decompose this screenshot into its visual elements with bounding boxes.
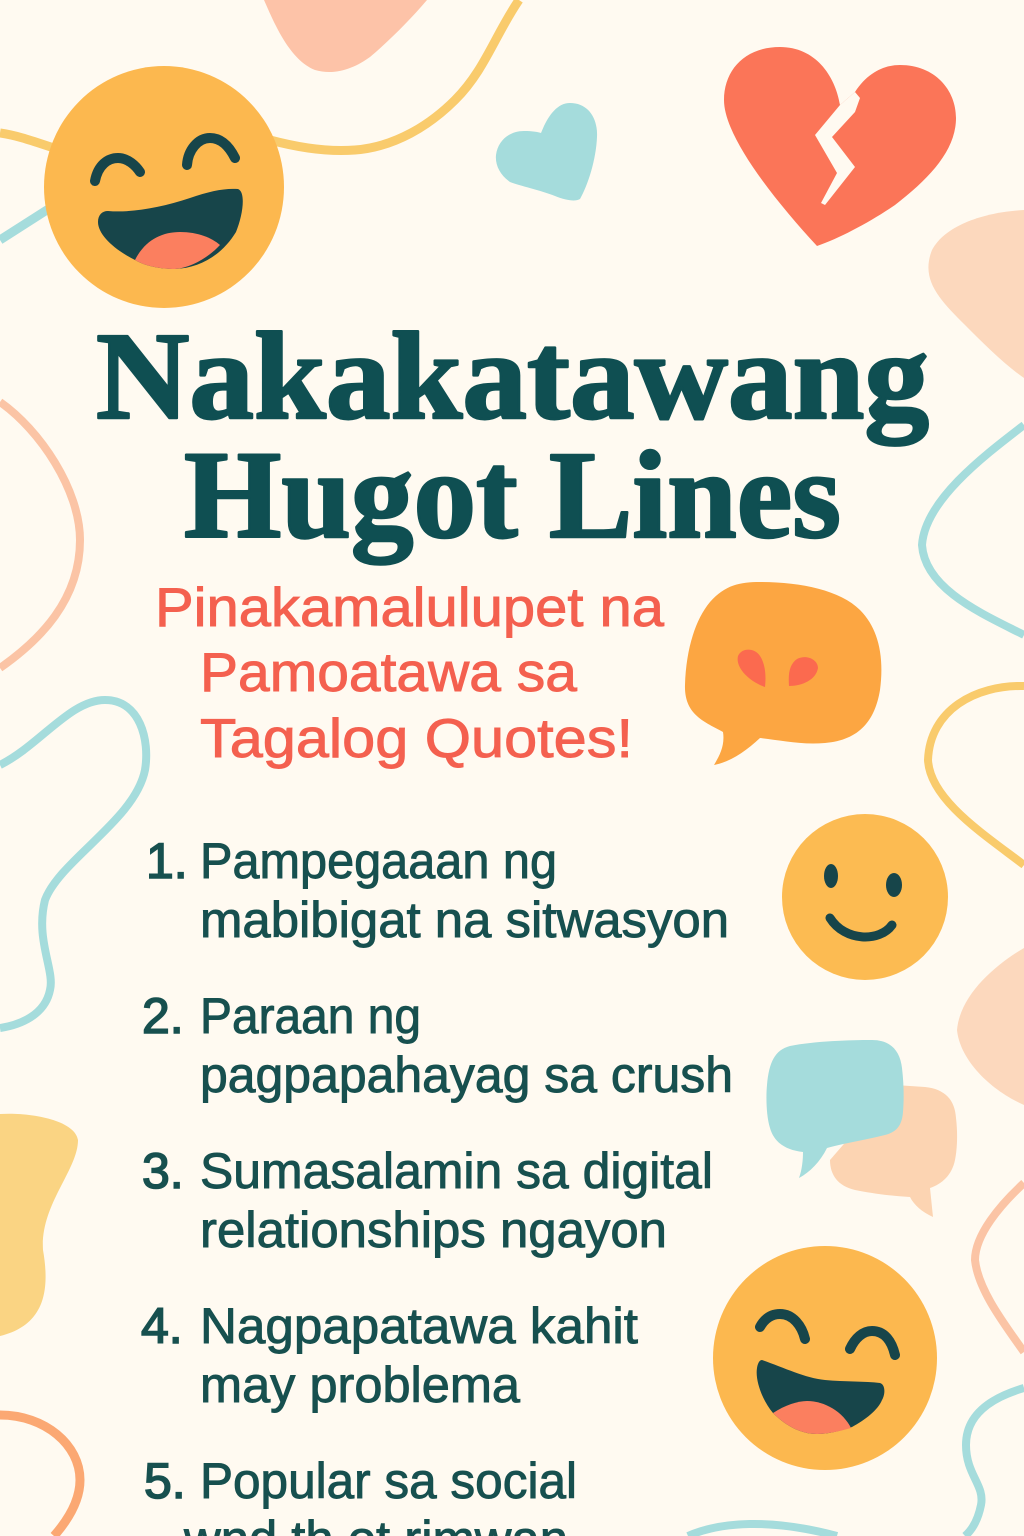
line: yellow top curve	[0, 0, 519, 151]
item 4	[141, 1298, 638, 1413]
icon: two chat bubbles	[766, 1040, 957, 1217]
subtitle	[155, 576, 664, 769]
item 2	[142, 988, 733, 1103]
item 3	[142, 1143, 713, 1258]
title: Nakakatawang	[96, 308, 929, 446]
icon: smiling emoji	[782, 814, 948, 980]
blob: right peach upper	[928, 210, 1024, 378]
line: teal left middle	[0, 700, 146, 1028]
item 1	[146, 833, 729, 948]
title: Hugot Lines	[184, 427, 841, 565]
line: peach right	[975, 1183, 1024, 1352]
icon: laughing emoji top left	[44, 66, 284, 308]
item 2: pagpapahayag sa crush	[200, 1047, 733, 1103]
title	[96, 308, 929, 565]
item 1: mabibigat na sitwasyon	[200, 892, 729, 948]
subtitle: Tagalog Quotes!	[200, 707, 633, 769]
item 2: 2.	[142, 988, 184, 1044]
item 4: 4.	[141, 1298, 183, 1354]
item 3: 3.	[142, 1143, 184, 1199]
item 2: Paraan ng	[200, 988, 421, 1044]
line: teal lower right	[965, 1388, 1024, 1536]
list	[141, 833, 733, 1536]
item 1: Pampegaaan ng	[200, 833, 557, 889]
blob: top peach	[264, 0, 427, 72]
item 5: Popular sa social	[200, 1453, 577, 1509]
icon: laughing emoji bottom right	[713, 1246, 937, 1470]
line: teal right	[922, 425, 1024, 635]
item 3: relationships ngayon	[200, 1202, 667, 1258]
item 4: Nagpapatawa kahit	[200, 1298, 638, 1354]
item 5: 5.	[144, 1453, 186, 1509]
subtitle: Pinakamalulupet na	[155, 576, 664, 638]
item 4: may problema	[200, 1357, 520, 1413]
item 5	[144, 1453, 577, 1536]
item 1: 1.	[146, 833, 188, 889]
line: yellow right	[928, 686, 1024, 865]
subtitle: Pamoatawa sa	[200, 641, 577, 703]
icon: small teal heart	[496, 103, 597, 200]
item 3: Sumasalamin sa digital	[200, 1143, 713, 1199]
icon: broken heart	[724, 47, 956, 246]
line: orange lower left	[0, 1415, 80, 1536]
line: teal bottom	[688, 1524, 837, 1536]
line: peach left	[0, 402, 80, 668]
line: teal left top	[0, 208, 50, 240]
blob: left yellow	[0, 1114, 78, 1336]
blob: right peach lower	[957, 948, 1024, 1105]
icon: orange speech bubble	[685, 582, 881, 765]
